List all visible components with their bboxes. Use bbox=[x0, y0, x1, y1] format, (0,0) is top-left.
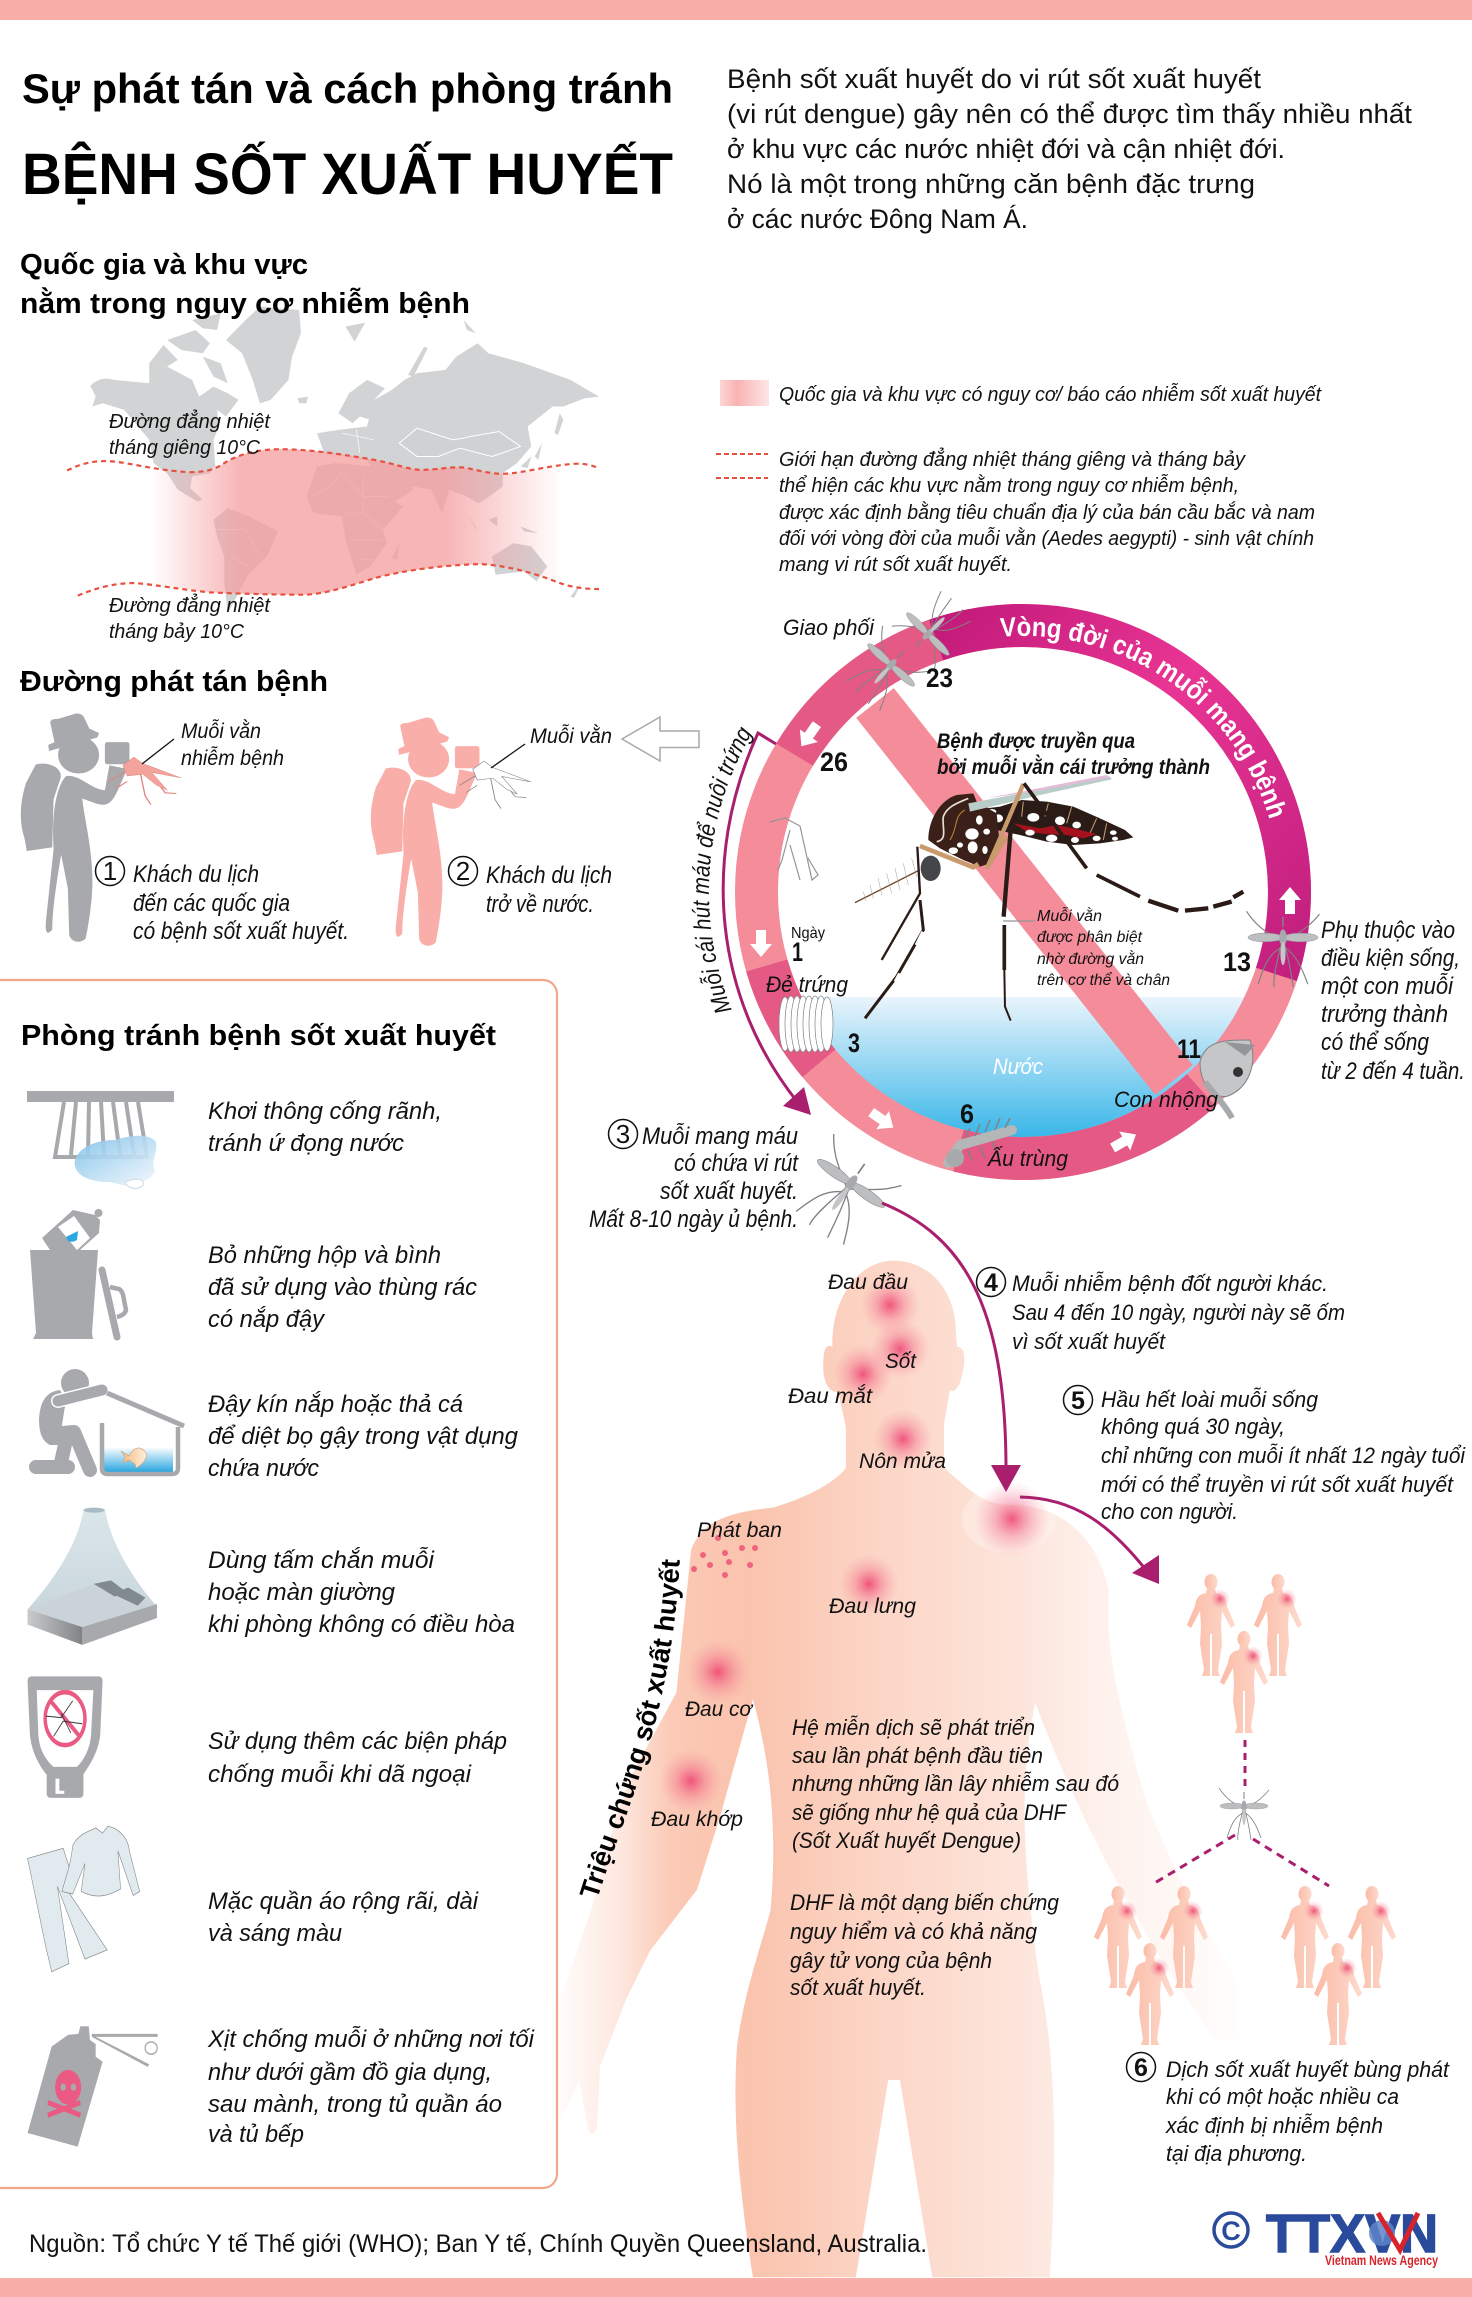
symptom labels: Đau mắt bbox=[788, 1385, 873, 1408]
stripes caption: nhờ đường vằn bbox=[1037, 949, 1144, 968]
text: drains: Khơi thông cống rãnh, bbox=[208, 1098, 442, 1125]
lifecycle labels bbox=[766, 615, 1251, 1171]
label mosquito 1: nhiễm bệnh bbox=[181, 747, 284, 770]
text: drains: tránh ứ đọng nước bbox=[208, 1130, 404, 1157]
lifespan text: có thể sống bbox=[1321, 1029, 1430, 1056]
DHF text bbox=[790, 1890, 1060, 2000]
step 3 text: có chứa vi rút bbox=[674, 1150, 799, 1177]
centre caption bbox=[937, 730, 1210, 779]
label mosquito 2: Muỗi vằn bbox=[530, 725, 612, 748]
adult mosquito day 13 bbox=[1246, 911, 1320, 987]
label line 1 bbox=[142, 739, 174, 764]
text: net: khi phòng không có điều hòa bbox=[208, 1611, 515, 1638]
step 5 text: mới có thể truyền vi rút sốt xuất huyết bbox=[1101, 1472, 1454, 1497]
lifecycle labels: Ngày bbox=[791, 925, 825, 942]
lifespan text: trưởng thành bbox=[1321, 1001, 1448, 1028]
symptom labels: Phát ban bbox=[697, 1519, 782, 1542]
label line 2 bbox=[491, 744, 525, 768]
logo: Vietnam News Agency bbox=[1325, 2252, 1438, 2268]
arrow: return to home country bbox=[622, 717, 699, 761]
legend explanation: đối với vòng đời của muỗi vằn (Aedes aegypti) - sinh vật chính bbox=[779, 527, 1314, 550]
lifecycle labels: Con nhộng bbox=[1114, 1087, 1219, 1112]
bottom bar bbox=[0, 2278, 1472, 2297]
intro text: Nó là một trong những căn bệnh đặc trưng bbox=[727, 169, 1255, 199]
text: clothing: và sáng màu bbox=[208, 1920, 342, 1947]
step number 4: 4 bbox=[984, 1269, 998, 1297]
map labels: Đường đẳng nhiệt bbox=[109, 410, 271, 433]
icon: mosquito net bbox=[28, 1508, 157, 1645]
map labels: tháng giêng 10°C bbox=[109, 437, 261, 459]
larva bbox=[946, 1118, 1012, 1167]
text: net bbox=[208, 1546, 515, 1638]
text: net: hoặc màn giường bbox=[208, 1579, 396, 1606]
text: rubbish bbox=[208, 1242, 477, 1333]
step number 6: 6 bbox=[1134, 2054, 1148, 2082]
symptom spot: muscle pain bbox=[686, 1640, 750, 1704]
step number 6 bbox=[1126, 2052, 1156, 2082]
text: rubbish: có nắp đậy bbox=[208, 1306, 326, 1333]
stripes caption: trên cơ thể và chân bbox=[1037, 971, 1170, 989]
step 6 text: xác định bị nhiễm bệnh bbox=[1165, 2113, 1383, 2138]
step 6 text bbox=[1165, 2057, 1450, 2166]
step 5 bbox=[1064, 1386, 1466, 1524]
text: drains bbox=[208, 1098, 442, 1157]
label mosquito 1 bbox=[181, 720, 284, 770]
text: cover water: để diệt bọ gậy trong vật dụng bbox=[208, 1423, 519, 1450]
symptom labels: Sốt bbox=[885, 1350, 917, 1373]
logo: TTXVN bbox=[1266, 2204, 1438, 2264]
map labels bbox=[109, 410, 271, 643]
step number 3 bbox=[608, 1119, 638, 1149]
lifecycle labels: 3 bbox=[848, 1028, 860, 1058]
icon: repellent tube bbox=[28, 1676, 103, 1798]
mosquito carrying blood bbox=[783, 1134, 903, 1255]
pupa bbox=[1200, 1040, 1255, 1118]
legend explanation: được xác định bằng tiêu chuẩn địa lý của bán cầu bắc và nam bbox=[779, 501, 1315, 524]
legend risk text: Quốc gia và khu vực có nguy cơ/ báo cáo nhiễm sốt xuất huyết bbox=[779, 383, 1322, 406]
symptom labels: Đau đầu bbox=[828, 1271, 908, 1294]
step 3 text: Muỗi mang máu bbox=[642, 1122, 798, 1150]
people group top bbox=[1187, 1574, 1302, 1733]
symptom spot: eye pain bbox=[833, 1344, 893, 1404]
symptom spot: vomiting bbox=[873, 1409, 933, 1469]
lifecycle labels: Đẻ trứng bbox=[766, 972, 849, 997]
text: spray: sau mành, trong tủ quần áo bbox=[208, 2091, 502, 2118]
traveler 1 bbox=[21, 713, 349, 945]
intro text bbox=[727, 64, 1413, 234]
step 4 text: Muỗi nhiễm bệnh đốt người khác. bbox=[1012, 1271, 1328, 1296]
legend dashed lines bbox=[716, 454, 768, 478]
step number 3: 3 bbox=[616, 1119, 630, 1149]
centre caption: bởi muỗi vằn cái trưởng thành bbox=[937, 756, 1210, 779]
dashed branches bbox=[1153, 1835, 1329, 1886]
step 5 text bbox=[1101, 1387, 1466, 1524]
symptoms heading curved: Triệu chứng sốt xuất huyết bbox=[579, 1559, 683, 1896]
ghost mosquito bbox=[770, 818, 818, 880]
icon: drain grate bbox=[27, 1091, 174, 1188]
lifecycle labels: 23 bbox=[926, 663, 953, 693]
map labels: tháng bảy 10°C bbox=[109, 621, 245, 643]
step 6 bbox=[1126, 2052, 1450, 2166]
dashed link up bbox=[1244, 1740, 1246, 1786]
stripes caption bbox=[1037, 906, 1170, 989]
text: cover water: Đậy kín nắp hoặc thả cá bbox=[208, 1391, 463, 1418]
text: repellent: Sử dụng thêm các biện pháp bbox=[208, 1728, 507, 1755]
symptom spot: headache bbox=[860, 1275, 920, 1335]
text: repellent: chống muỗi khi dã ngoại bbox=[208, 1760, 472, 1788]
people group left bbox=[1094, 1886, 1208, 2045]
legend swatch bbox=[720, 380, 769, 406]
body figure with symptoms bbox=[550, 1261, 1273, 2277]
step 4 bbox=[976, 1268, 1345, 1354]
water bbox=[805, 997, 1244, 1137]
step number 2 bbox=[448, 856, 478, 886]
world map panel bbox=[67, 307, 599, 643]
centre caption: Bệnh được truyền qua bbox=[937, 730, 1135, 753]
step 1 text: Khách du lịch bbox=[133, 861, 259, 888]
text: clothing: Mặc quần áo rộng rãi, dài bbox=[208, 1888, 479, 1915]
step 5 text: không quá 30 ngày, bbox=[1101, 1414, 1285, 1439]
map labels: Đường đẳng nhiệt bbox=[109, 594, 271, 617]
intro text: ở các nước Đông Nam Á. bbox=[727, 204, 1028, 234]
DHF text: gây tử vong của bệnh bbox=[790, 1948, 992, 1973]
title: BỆNH SỐT XUẤT HUYẾT bbox=[22, 142, 673, 207]
legend explanation: thể hiện các khu vực nằm trong nguy cơ nhiễm bệnh, bbox=[779, 474, 1239, 497]
lifespan text bbox=[1321, 917, 1465, 1085]
curved label: blood feeding: Muỗi cái hút máu để nuôi trứng bbox=[692, 726, 754, 1013]
step number 2: 2 bbox=[456, 856, 470, 886]
isotherm lines bbox=[67, 449, 599, 596]
mating mosquitoes bbox=[837, 582, 980, 720]
title: Sự phát tán và cách phòng tránh bbox=[22, 65, 673, 112]
ring arrows bbox=[750, 718, 1301, 1158]
map heading: nằm trong nguy cơ nhiễm bệnh bbox=[20, 286, 470, 320]
arrow: blood feeding bbox=[723, 733, 811, 1115]
immunity text bbox=[792, 1715, 1119, 1853]
text: spray: và tủ bếp bbox=[208, 2121, 304, 2148]
uninfected mosquito bbox=[459, 761, 531, 809]
title bbox=[22, 65, 673, 207]
step number 4 bbox=[976, 1268, 1006, 1297]
step 3 text: Mất 8-10 ngày ủ bệnh. bbox=[589, 1206, 798, 1233]
source: Nguồn: Tổ chức Y tế Thế giới (WHO); Ban Y tế, Chính Quyền Queensland, Australia. bbox=[29, 2230, 927, 2258]
lifecycle circle bbox=[735, 591, 1465, 1180]
step 2 text: Khách du lịch bbox=[486, 862, 612, 889]
arrow: mosquito to shoulder bbox=[882, 1203, 1021, 1492]
lifecycle labels: Giao phối bbox=[783, 615, 875, 640]
legend explanation: mang vi rút sốt xuất huyết. bbox=[779, 554, 1012, 576]
small mosquito bbox=[1219, 1788, 1269, 1840]
people group right bbox=[1281, 1886, 1396, 2045]
step 2 text: trở về nước. bbox=[486, 891, 594, 918]
step 4 text bbox=[1012, 1271, 1345, 1354]
symptom spot: back pain bbox=[839, 1554, 899, 1614]
text: cover water: chứa nước bbox=[208, 1455, 319, 1482]
map heading bbox=[20, 249, 470, 320]
lifespan text: Phụ thuộc vào bbox=[1321, 917, 1455, 944]
text: rubbish: Bỏ những hộp và bình bbox=[208, 1242, 441, 1269]
traveler 2 bbox=[371, 717, 612, 946]
immunity text: sau lần phát bệnh đầu tiên bbox=[792, 1743, 1043, 1768]
lifecycle labels: 11 bbox=[1177, 1034, 1201, 1064]
step 3 text bbox=[589, 1122, 799, 1233]
ring segments bbox=[756, 625, 1290, 1159]
spread heading: Đường phát tán bệnh bbox=[20, 666, 328, 698]
lifecycle labels: Ấu trùng bbox=[986, 1146, 1069, 1171]
symptom labels bbox=[651, 1271, 946, 1831]
stripes caption: được phân biệt bbox=[1037, 929, 1143, 946]
logo: C bbox=[1221, 2216, 1241, 2246]
step number 5: 5 bbox=[1071, 1387, 1085, 1415]
immunity text: nhưng những lần lây nhiễm sau đó bbox=[792, 1771, 1119, 1796]
text: spray bbox=[207, 2025, 535, 2148]
infected mosquito bbox=[109, 757, 181, 805]
immunity text: Hệ miễn dịch sẽ phát triển bbox=[792, 1715, 1035, 1740]
symptom spot: fever bbox=[870, 1319, 930, 1379]
text: net: Dùng tấm chắn muỗi bbox=[208, 1546, 435, 1574]
legend explanation: Giới hạn đường đẳng nhiệt tháng giêng và tháng bảy bbox=[779, 448, 1246, 471]
risk band bbox=[151, 449, 562, 595]
step 2 text bbox=[486, 862, 612, 918]
lifecycle labels: 1 bbox=[792, 937, 803, 967]
icon: trash bin bbox=[30, 1209, 126, 1339]
adult mosquito large bbox=[855, 775, 1243, 1021]
prohibition bar bbox=[875, 703, 1174, 1080]
text: clothing bbox=[208, 1888, 479, 1947]
step 4 text: vì sốt xuất huyết bbox=[1012, 1329, 1166, 1354]
step number 5 bbox=[1064, 1386, 1092, 1415]
step 4 text: Sau 4 đến 10 ngày, người này sẽ ốm bbox=[1012, 1300, 1345, 1325]
symptom labels: Đau khớp bbox=[651, 1808, 743, 1831]
symptom spot: shoulder bite bbox=[974, 1481, 1050, 1557]
leader line bbox=[1003, 920, 1035, 922]
intro text: ở khu vực các nước nhiệt đới và cận nhiệt đới. bbox=[727, 134, 1285, 164]
step 5 text: cho con người. bbox=[1101, 1499, 1238, 1524]
icon: insecticide spray bbox=[28, 2026, 158, 2147]
lifecycle labels: 13 bbox=[1223, 947, 1251, 977]
text: repellent bbox=[208, 1728, 507, 1788]
map heading: Quốc gia và khu vực bbox=[20, 249, 308, 281]
intro text: Bệnh sốt xuất huyết do vi rút sốt xuất huyết bbox=[727, 64, 1262, 94]
step 6 text: Dịch sốt xuất huyết bùng phát bbox=[1166, 2057, 1450, 2082]
step number 1 bbox=[96, 856, 124, 886]
arrow: shoulder to people bbox=[1020, 1497, 1159, 1584]
DHF text: sốt xuất huyết. bbox=[790, 1975, 926, 2000]
text: rubbish: đã sử dụng vào thùng rác bbox=[208, 1274, 477, 1301]
icon: loose clothing bbox=[28, 1826, 140, 1972]
step 3 text: sốt xuất huyết. bbox=[660, 1178, 798, 1205]
DHF text: nguy hiểm và có khả năng bbox=[790, 1919, 1038, 1944]
prevention heading: Phòng tránh bệnh sốt xuất huyết bbox=[21, 1020, 496, 1052]
step 1 text bbox=[133, 861, 349, 945]
legend explanation bbox=[779, 448, 1315, 576]
ring title curved: Vòng đời của muỗi mang bệnh bbox=[1000, 616, 1286, 818]
stripes caption: Muỗi vằn bbox=[1037, 906, 1102, 925]
symptom labels: Đau lưng bbox=[829, 1595, 916, 1618]
step 1 text: đến các quốc gia bbox=[133, 890, 290, 917]
intro text: (vi rút dengue) gây nên có thể được tìm thấy nhiều nhất bbox=[727, 99, 1413, 129]
step 6 text: khi có một hoặc nhiều ca bbox=[1166, 2084, 1399, 2109]
symptom: rash dots bbox=[691, 1535, 758, 1578]
step 6 text: tại địa phương. bbox=[1166, 2141, 1307, 2166]
text: spray: như dưới gầm đồ gia dụng, bbox=[208, 2059, 492, 2086]
panel: prevention bbox=[0, 980, 557, 2188]
lifecycle labels: 6 bbox=[960, 1099, 974, 1129]
lifecycle labels: 26 bbox=[820, 747, 848, 777]
label mosquito 1: Muỗi vằn bbox=[181, 720, 261, 743]
icon: water container with fish bbox=[36, 1369, 184, 1474]
immunity text: (Sốt Xuất huyết Dengue) bbox=[792, 1828, 1021, 1853]
lifespan text: một con muỗi bbox=[1321, 972, 1454, 1000]
symptom spot: joint pain bbox=[659, 1749, 723, 1813]
step 3 bbox=[589, 1119, 903, 1255]
step number 1: 1 bbox=[103, 856, 117, 886]
eggs bbox=[779, 996, 833, 1052]
step 1 text: có bệnh sốt xuất huyết. bbox=[133, 918, 349, 945]
DHF text: DHF là một dạng biến chứng bbox=[790, 1890, 1060, 1915]
step 5 text: Hầu hết loài muỗi sống bbox=[1101, 1387, 1319, 1412]
symptom labels: Nôn mửa bbox=[859, 1450, 946, 1473]
symptom labels: Đau cơ bbox=[685, 1698, 754, 1721]
immunity text: sẽ giống như hệ quả của DHF bbox=[792, 1800, 1067, 1825]
continents bbox=[90, 307, 599, 613]
text: cover water bbox=[208, 1391, 519, 1482]
text: spray: Xịt chống muỗi ở những nơi tối bbox=[207, 2025, 535, 2053]
legend bbox=[716, 380, 1322, 576]
top bar bbox=[0, 0, 1472, 20]
lifecycle labels: Nước bbox=[993, 1054, 1043, 1079]
